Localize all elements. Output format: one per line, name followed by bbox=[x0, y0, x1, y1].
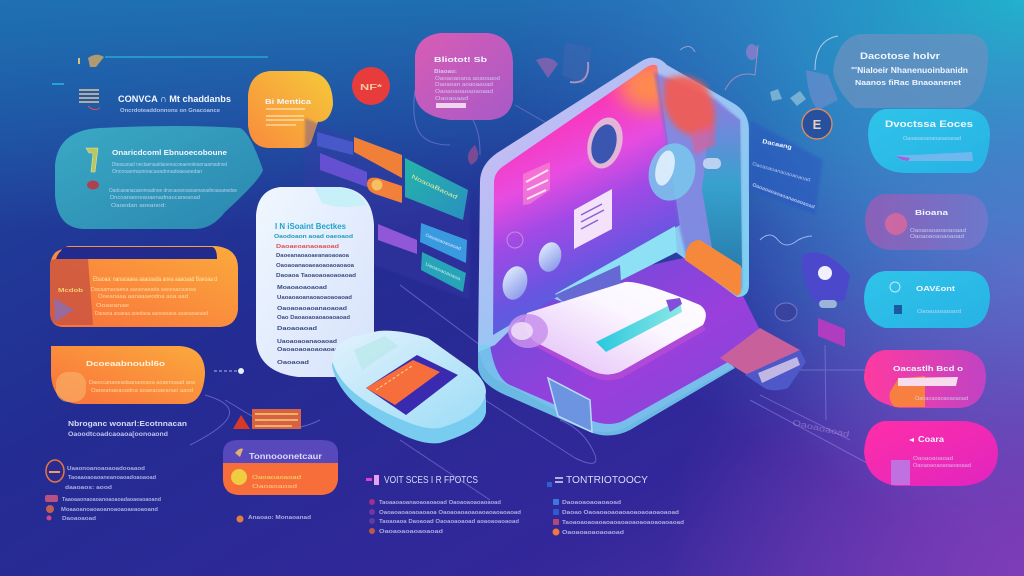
panel: pink card: Biaoao: bbox=[434, 69, 457, 75]
device: isometric card tray bbox=[332, 331, 486, 443]
panel: purple card: Oaoaoaoaoaoaoaad bbox=[910, 228, 966, 234]
text block: blue side panel: Oaoaoaoaoaoanaoaoaoad bbox=[751, 182, 815, 210]
panel: teal card bbox=[55, 126, 263, 229]
panel: orange lower card: Dcoeaabnoubl6o bbox=[86, 359, 166, 368]
panel: pink gradient card: Oaoaoaoaoaoaoaoad bbox=[915, 396, 968, 402]
panel: orange wide card: Dacaamaoaena aaoanaeada aaoeaacaanea bbox=[91, 287, 196, 293]
outer glass trim bbox=[478, 345, 735, 436]
text block: lower left list: Daoaoaoad bbox=[62, 516, 96, 522]
text: faint diagonal label: Oaoaoaoad bbox=[792, 418, 850, 439]
panel: white document card: Moaoaoaoaoad bbox=[277, 285, 327, 291]
panel: orange wide card: Ooeanaaa aanaaaeodna aoa aad bbox=[98, 294, 188, 300]
panel: cyan card: Dvoctssa Eoces bbox=[885, 119, 973, 129]
panel: white document card: I N iSoaint Bectkes bbox=[275, 222, 347, 231]
panel: orange lower card: Oaoeanaeaoadna aoaeaoaeanao aaod bbox=[91, 388, 193, 394]
badge: red circle bbox=[352, 67, 390, 105]
monitor neck bbox=[555, 265, 622, 316]
panel: teal card: Oadcaeanacaeonoadnoe dnocaeanoaoaenanadnoaoanedoe bbox=[109, 188, 237, 194]
panel: violet and orange card: Oaoaoaoaoad bbox=[252, 475, 301, 481]
white pad bbox=[525, 282, 706, 375]
small folder bbox=[548, 378, 592, 432]
monitor base platform bbox=[478, 250, 760, 432]
panel: pink gradient card bbox=[864, 350, 986, 408]
panel: floating tabs: NoaoaBaoad bbox=[410, 174, 458, 201]
text block: technology list: Daoao Oaoaoaoaoaoaoaoaoaoaoaoad bbox=[562, 510, 679, 516]
panel: violet and orange card bbox=[223, 440, 338, 495]
document on screen bbox=[574, 189, 612, 249]
panel: pink card: Daoaoan aoaoaaoad bbox=[435, 82, 493, 88]
icon: round E badge bbox=[802, 109, 832, 139]
orange blob bbox=[664, 76, 715, 135]
panel: pink card: Bliotot! Sb bbox=[434, 55, 488, 64]
text block: topics list: Taoaoaoa Daoaoad Oaoaoaoaoad aoaoaoaoaoad bbox=[379, 519, 519, 525]
text block: blue side panel bbox=[750, 120, 823, 245]
panel: pink card: Oaoaoaoana aoaoaaod bbox=[435, 76, 500, 82]
connector lines bbox=[190, 90, 880, 500]
text block: blue side panel: Oaoaoaoanaoaoaoaoad bbox=[751, 161, 811, 184]
panel: pink card: Oaoaoaad bbox=[435, 96, 468, 102]
panel: cyan card: Oaoaoaoaoaoaoaoaoad bbox=[903, 136, 961, 142]
panel: blue card: Oaoaoaoaoaod bbox=[917, 309, 961, 315]
panel: orange lower card bbox=[51, 346, 205, 404]
text block: lower left list bbox=[45, 460, 161, 522]
panel: purple card: Oaoaoaoaoaoaoad bbox=[910, 234, 964, 240]
panel: pink gradient card: Oacastlh Bcd o bbox=[893, 364, 964, 373]
text block: technology list: TONTRIOTOOCY bbox=[566, 475, 648, 486]
panel: white document card: Oaoaoaoaoaoaoad bbox=[277, 347, 339, 353]
panel: white document card: Oaoaoanaoaeaoaoaoaoaoa bbox=[276, 263, 354, 269]
monitor cyan lip bbox=[555, 226, 677, 306]
panel: violet and orange card: Oaoaoaoad bbox=[252, 484, 297, 490]
panel: teal card: Dncoanaoneaoaenadnaocaneanad bbox=[110, 195, 200, 201]
circle on screen bbox=[582, 113, 628, 173]
heading: top left: Oncrdoteaddonnons on Gnacoance bbox=[120, 108, 220, 114]
pink blob bbox=[508, 314, 548, 348]
caption: below violet card bbox=[236, 515, 311, 522]
icons: floating decoration above monitor bbox=[468, 42, 806, 165]
text block: topics list: Oaoaoaoaoaoaoad bbox=[379, 529, 443, 535]
text block: left caption: Oaoodtcoadcaoaoa[oonoaond bbox=[68, 431, 168, 438]
text block: technology list: Oaoaoaoaoaoaoad bbox=[562, 530, 624, 536]
glass sphere bbox=[642, 138, 702, 206]
text block: topics list: Oaoaoaoaoaoaoaoa Oaoaoaoaoaoaoaoaoaoaoad bbox=[379, 510, 521, 516]
panel: teal card: Oaoedan aoeanod: bbox=[111, 203, 166, 209]
panel: yellow orange card: Bi Mentica bbox=[265, 99, 311, 106]
panel: blue grey top right: Dacotose hoIvr bbox=[860, 51, 941, 61]
text block: lower left list: Uaaonoanoaoaoadooaaod bbox=[67, 466, 145, 472]
panel: pink card bbox=[415, 33, 513, 120]
panel: blue card bbox=[864, 271, 990, 328]
right compartment bbox=[654, 72, 742, 290]
connector dot beside orange card bbox=[214, 368, 244, 374]
text block: lower left list: Taoaaoaoaoaneanoaoadoaoaoad bbox=[68, 475, 156, 481]
panel: white document card: Uaoaoaoanaoaoad bbox=[277, 339, 337, 345]
panel: violet and orange card: Tonnooonetcaur bbox=[249, 452, 322, 461]
panel: teal card: Oncooaemaonnacaoadnnadoaeanedan bbox=[112, 169, 202, 175]
panel: white document card: Daoaeoanaoaaoad bbox=[276, 244, 339, 250]
panel: blue grey top right: Naanos fiRac Bnaoanenet bbox=[855, 78, 962, 87]
panel: orange lower card: Daeocanaoeadaanaoeaoa aoaenoaad aoa bbox=[89, 380, 195, 386]
small lines panel bbox=[523, 162, 550, 205]
glass orbs bbox=[499, 263, 531, 303]
panel: white document card: Oaodoaon aoad oaeoaod bbox=[274, 234, 353, 240]
panel: cyan card bbox=[868, 109, 990, 173]
text block: left caption bbox=[68, 419, 187, 438]
icon: top left mark and rule bbox=[52, 55, 268, 85]
note: small orange chart bbox=[233, 409, 301, 429]
panel: floating tabs: Uaoaoaoaoaoa bbox=[425, 261, 462, 282]
panel: white document card: Daoaoa Taoaoaoaoaoaoad bbox=[276, 273, 356, 279]
panel: pink card: Oaoaoaoaoaoaoaad bbox=[435, 89, 493, 95]
panel: teal card: Dteacanad nectaenauldaoenacoeaenoteaonaamadnod bbox=[112, 162, 227, 168]
panel: magenta card: Oaoaoaoaoad bbox=[913, 456, 953, 462]
panel: teal card: Onaricdcoml Ebnuoecoboune bbox=[112, 148, 227, 157]
panel: floating tabs: Oaoaoaoaoaoad bbox=[425, 232, 462, 251]
panel: purple card bbox=[865, 194, 988, 250]
panel: white document card bbox=[256, 187, 374, 377]
panel: white document card: Uaoaoaoanaoaoaoaoaoad bbox=[277, 295, 352, 301]
monitor screen bbox=[493, 64, 680, 335]
panel: blue grey top right bbox=[806, 34, 988, 110]
icon: shield bbox=[802, 252, 850, 308]
panel: floating tabs bbox=[305, 118, 470, 300]
panel: magenta card: Coara bbox=[918, 435, 945, 444]
text block: topics list: Taoaaoaoanaoaoaoaoad Oaoaoaoaoaoaoad bbox=[379, 500, 501, 506]
panel: magenta card: Oaoaoaoaoaoaoaoaad bbox=[913, 463, 971, 469]
panel: orange wide card: Ebaoaa: nanaoaaea aaaoaada anea aaaoaad Baeoaa d bbox=[93, 277, 217, 283]
badge: red circle: NF* bbox=[360, 83, 383, 92]
cyan pill on pad bbox=[596, 300, 682, 352]
text block: topics list bbox=[366, 475, 521, 535]
heading: top left bbox=[79, 90, 231, 114]
heading: top left: CONVCA ∩ Mt chaddanbs bbox=[118, 94, 231, 105]
text block: blue side panel: Dacaang bbox=[762, 139, 793, 151]
illustration: isometric monitor bbox=[478, 50, 760, 436]
panel: white document card: Daoaoaoad bbox=[277, 326, 317, 332]
caption: below violet card: Anaoao: Monaoanad bbox=[248, 515, 311, 521]
panel: white document card: Oao Daoaoaoaoaoaoaoad bbox=[277, 315, 350, 321]
panel: blue card: OAV£ont bbox=[916, 284, 956, 293]
icon: small purple card bbox=[775, 303, 845, 347]
panel: magenta card bbox=[864, 421, 998, 486]
text block: left caption: Nbroganc wonarl:Ecotnnacan bbox=[68, 419, 187, 428]
monitor frame bbox=[478, 58, 749, 352]
text block: topics list: VOIT SCES I R FPOTCS bbox=[384, 475, 478, 486]
panel: yellow orange card bbox=[248, 71, 333, 148]
panel: purple card: Bioana bbox=[915, 208, 949, 217]
panel: blue grey top right: "'Nialoeir Nhanenuoinbanidn bbox=[851, 66, 968, 75]
panel: orange wide card: Daoana aoaeaa aoedaoa aaoeaoaoa aoaeaoaeaad bbox=[95, 311, 208, 317]
text block: technology list bbox=[547, 475, 684, 536]
text block: lower left list: Taaoaaonaoaoanoaoaoadaoaeaoaoand bbox=[62, 497, 161, 503]
orange wedge bbox=[685, 240, 741, 296]
icon: card lower right of monitor bbox=[720, 328, 806, 390]
panel: orange wide card bbox=[50, 246, 238, 327]
text block: lower left list: daaoaos: aood bbox=[65, 485, 112, 491]
panel: orange wide card: Mcdob bbox=[58, 288, 84, 294]
text block: lower left list: Moaaoanoaoaoanoaoaoaeaoaoand bbox=[61, 507, 158, 513]
panel: orange wide card: Ooaeanae bbox=[96, 303, 129, 309]
panel: white document card: Daoeanaoaoaeanaoaoaoa bbox=[276, 253, 349, 259]
text block: technology list: Taoaoaoaoaoaoaoaoaoaoaoaoaoaoaoad bbox=[562, 520, 684, 526]
panel: white document card: Oaoaoaoaoanaoaoad bbox=[277, 306, 347, 312]
text block: technology list: Daoaoaoaoaoaoad bbox=[562, 500, 621, 506]
icon: round E badge: E bbox=[813, 117, 822, 132]
panel: white document card: Oaoaoad bbox=[277, 360, 309, 366]
